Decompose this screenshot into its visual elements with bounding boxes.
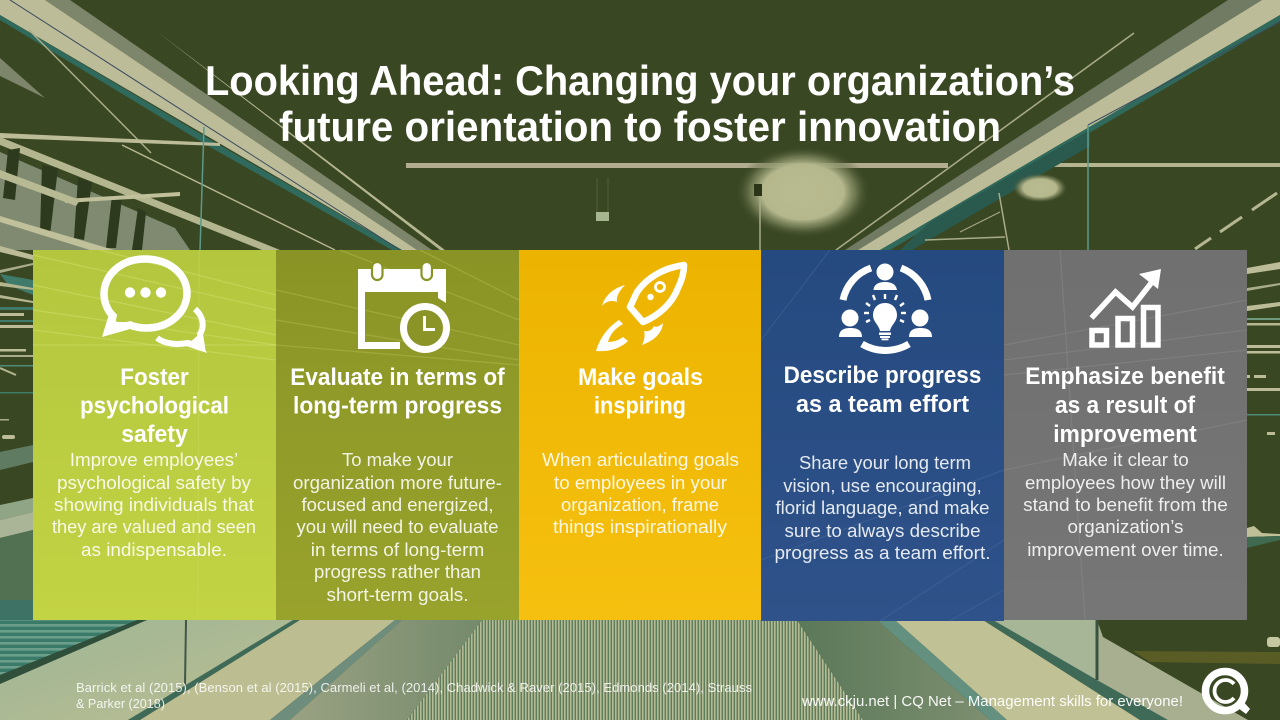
heading — [784, 362, 981, 418]
heading: inspiring — [594, 392, 686, 420]
heading: Make goals — [578, 364, 703, 391]
heading — [80, 364, 229, 448]
panel: foster psychological safety — [33, 250, 276, 620]
panel: benefit from improvement — [1004, 250, 1247, 620]
body text: as indispensable. — [81, 539, 227, 560]
references — [76, 680, 752, 711]
heading — [1025, 363, 1225, 448]
heading: long-term progress — [293, 392, 502, 420]
references: Barrick et al (2015), (Benson et al (2015), Carmeli et al, (2014), Chadwick & Raver (2015), Edmonds (2014), Strauss — [76, 680, 752, 695]
body text: sure to always describe — [784, 520, 980, 541]
heading: safety — [121, 421, 188, 448]
body text: When articulating goals — [542, 449, 739, 470]
body text: improvement over time. — [1027, 539, 1224, 560]
icon: speech bubbles — [102, 259, 207, 353]
body text: To make your — [342, 449, 453, 470]
title — [205, 57, 1075, 150]
body text: vision, use encouraging, — [783, 475, 982, 496]
body text: in terms of long-term — [311, 539, 484, 560]
body text — [774, 452, 990, 563]
body text: psychological safety by — [57, 472, 252, 493]
title: Looking Ahead: Changing your organization’s — [205, 57, 1075, 104]
heading: improvement — [1053, 421, 1197, 448]
body text: Make it clear to — [1062, 449, 1189, 470]
body text — [293, 449, 502, 605]
body text: organization, frame — [561, 494, 719, 515]
body text: Share your long term — [799, 452, 971, 473]
body text: they are valued and seen — [52, 516, 256, 537]
panel: evaluate long-term progress — [276, 250, 519, 620]
body text — [542, 449, 739, 537]
icon: rising chart — [1092, 269, 1161, 345]
body text: stand to benefit from the — [1023, 494, 1228, 515]
body text: progress rather than — [314, 561, 481, 582]
heading — [290, 364, 505, 420]
body text: organization more future- — [293, 472, 502, 493]
panel: team effort — [761, 250, 1004, 621]
heading: as a result of — [1055, 392, 1196, 419]
body text: employees how they will — [1025, 472, 1226, 493]
body text: organization’s — [1068, 516, 1184, 537]
heading: Emphasize benefit — [1025, 363, 1225, 390]
body text: focused and energized, — [302, 494, 494, 515]
body text: Improve employees’ — [70, 449, 238, 470]
body text: showing individuals that — [54, 494, 254, 515]
website tagline: www.ckju.net | CQ Net – Management skills for everyone! — [801, 694, 1183, 710]
heading: Foster — [120, 364, 189, 391]
body text — [52, 449, 256, 560]
heading: Evaluate in terms of — [290, 364, 505, 391]
body text: to employees in your — [554, 472, 727, 493]
icon: calendar with clock — [358, 262, 446, 350]
heading — [578, 364, 703, 420]
body text: you will need to evaluate — [296, 516, 498, 537]
body text: short-term goals. — [326, 584, 468, 605]
body text: progress as a team effort. — [774, 542, 990, 563]
heading: psychological — [80, 392, 229, 420]
heading: Describe progress — [784, 362, 981, 389]
logo: CQ — [1206, 672, 1250, 714]
body text: things inspirationally — [553, 516, 728, 537]
body text: florid language, and make — [776, 497, 990, 518]
body text — [1023, 449, 1228, 560]
title: future orientation to foster innovation — [279, 103, 1001, 150]
panel: make goals inspiring — [519, 250, 761, 620]
icon: rocket — [596, 265, 684, 351]
icon: team and light bulb — [839, 264, 932, 350]
heading: as a team effort — [796, 391, 969, 418]
references: & Parker (2018) — [76, 696, 165, 711]
